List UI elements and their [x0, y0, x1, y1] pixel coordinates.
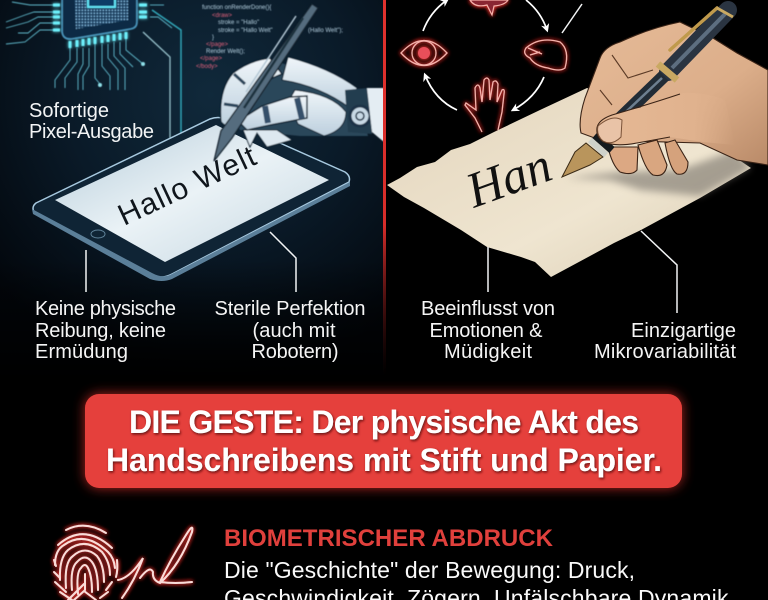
arrows [423, 0, 547, 110]
banner text: DIE GESTE: Der physische Akt des [129, 404, 639, 440]
code snippet [196, 5, 343, 70]
label: Sofortige Pixel-Ausgabe: Sofortige [29, 100, 109, 122]
code snippet: } [212, 35, 214, 41]
icon: feedback cycle [401, 0, 567, 132]
icon: processor chip with circuit traces [6, 0, 181, 140]
label: Keine physische Reibung: Reibung, keine [35, 320, 166, 342]
label: Sofortige Pixel-Ausgabe: Pixel-Ausgabe [29, 121, 154, 143]
tablet [32, 118, 350, 281]
pen shadow [566, 150, 751, 196]
icon: fingerprint with signature [54, 526, 192, 600]
code snippet: (Hallo Welt"); [308, 28, 343, 34]
icon: brain top [470, 0, 508, 15]
label: Beeinflusst von Emotionen: Beeinflusst von [421, 298, 555, 320]
code snippet: </body> [196, 64, 218, 70]
label: Keine physische Reibung [35, 298, 176, 363]
label: Einzigartige Mikrovariabilität: Mikrovariabilität [594, 341, 736, 363]
divider [383, 0, 386, 375]
code snippet: stroke = "Hallo" [218, 20, 259, 26]
handwriting: Han [458, 136, 559, 219]
label: Keine physische Reibung: Ermüdung [35, 341, 128, 363]
heading: biometrischer Abdruck: BIOMETRISCHER ABDRUCK [224, 525, 554, 552]
nib [562, 143, 603, 177]
label: Sterile Perfektion [214, 298, 366, 363]
leader line: paper right [641, 231, 677, 313]
text: biometric description: Die "Geschichte" der Bewegung: Druck, [224, 557, 635, 583]
panel: human side [387, 0, 768, 363]
code snippet: stroke = "Hallo Welt" [218, 28, 273, 34]
fountain pen [668, 10, 728, 72]
label: Einzigartige Mikrovariabilität: Einzigartige [631, 320, 736, 342]
banner: die Geste [85, 394, 682, 488]
code snippet: </page> [206, 42, 229, 48]
leader line: top right [562, 4, 582, 33]
panel: digital side [0, 0, 384, 380]
leader line: tablet right [270, 232, 296, 292]
robot pen [214, 4, 318, 161]
label: Keine physische Reibung: Keine physische [35, 298, 176, 320]
icon: robot hand holding pen [214, 4, 384, 161]
fingers [608, 147, 638, 174]
icon: eye [401, 40, 447, 66]
leader line: tablet left [85, 250, 87, 292]
thumb [596, 93, 735, 145]
label: Beeinflusst von Emotionen: Emotionen & [430, 320, 543, 342]
code snippet: </page> [200, 56, 223, 62]
label: Einzigartige Mikrovariabilität [594, 320, 736, 363]
icon: human hand with fountain pen [562, 8, 768, 177]
label: Sterile Perfektion: Robotern) [252, 341, 338, 363]
code snippet: Render Welt(); [206, 49, 245, 55]
icon: brain [525, 40, 567, 70]
label: Beeinflusst von Emotionen [421, 298, 555, 363]
text: biometric description [224, 557, 735, 600]
paper [387, 88, 751, 277]
code snippet: <draw> [212, 13, 233, 19]
code snippet: function onRenderDone(){ [202, 5, 271, 11]
screen text: Hallo Welt [113, 140, 262, 232]
label: Sterile Perfektion: (auch mit [252, 320, 336, 342]
label: Sofortige Pixel-Ausgabe [29, 100, 154, 143]
label: Beeinflusst von Emotionen: Müdigkeit [444, 341, 532, 363]
leader line: paper left [487, 247, 489, 292]
label: Sterile Perfektion: Sterile Perfektion [214, 298, 366, 320]
icon: hand [465, 78, 504, 132]
banner text [106, 404, 662, 478]
banner text: Handschreibens mit Stift und Papier. [106, 442, 662, 478]
screen [55, 125, 329, 262]
